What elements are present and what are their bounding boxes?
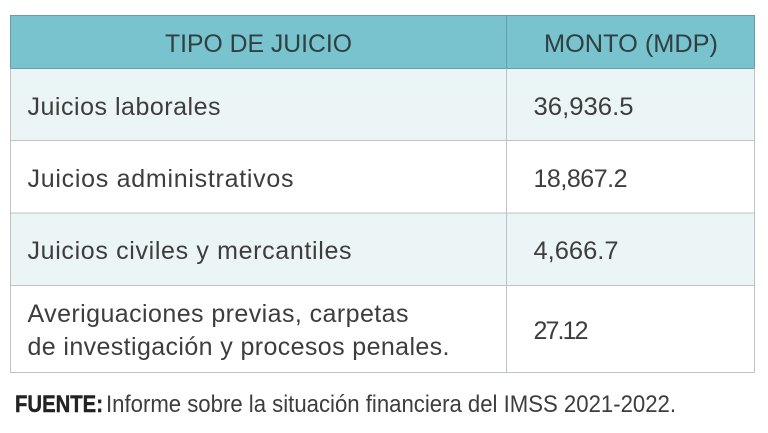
row: averiguaciones previas	[10, 286, 754, 372]
row: juicios administrativos: Juicios administrativos	[28, 165, 294, 193]
row: averiguaciones previas: 27.12	[534, 317, 588, 345]
row: juicios administrativos	[10, 141, 754, 213]
header: tipo de juicio: TIPO DE JUICIO	[165, 30, 352, 58]
header: monto: MONTO (MDP)	[544, 30, 718, 58]
row: juicios administrativos: 18,867.2	[534, 165, 628, 193]
row: juicios laborales: Juicios laborales	[28, 93, 220, 121]
row: juicios civiles y mercantiles: 4,666.7	[534, 237, 618, 265]
row: juicios laborales: 36,936.5	[534, 93, 634, 121]
row: averiguaciones previas: Averiguaciones previas, carpetas	[28, 300, 408, 328]
row: juicios civiles y mercantiles	[10, 214, 754, 286]
source note: FUENTE:	[15, 391, 103, 418]
row: juicios laborales	[10, 69, 754, 140]
row: juicios civiles y mercantiles: Juicios civiles y mercantiles	[28, 237, 352, 265]
source note: Informe sobre la situación financiera del IMSS 2021-2022.	[106, 391, 676, 418]
table header	[10, 15, 754, 68]
row: averiguaciones previas: de investigación y procesos penales.	[28, 333, 450, 361]
